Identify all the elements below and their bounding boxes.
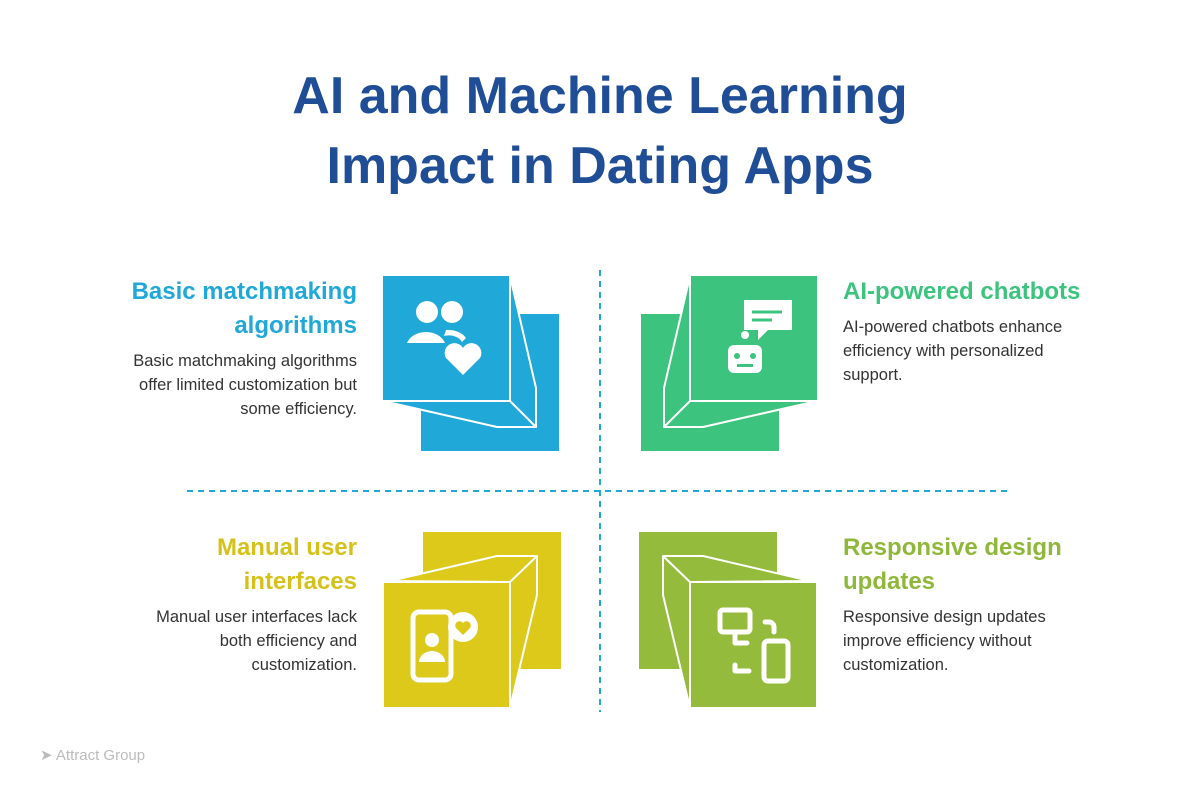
cube: yellow [383,531,562,708]
cube: blue [382,275,560,452]
logo: ➤ Attract Group [40,747,145,764]
title [292,67,908,195]
text: chatbots: AI-powered chatbots enhance efficiency with personalized support. [843,318,1062,384]
text: responsive: Responsive design updates [843,534,1062,595]
text: responsive: Responsive design updates improve efficiency without customization. [843,608,1046,674]
text: chatbots: AI-powered chatbots [843,278,1080,305]
icon: devices [720,610,788,681]
icon: phone heart [413,612,451,680]
text: basic matchmaking [132,278,357,418]
icon: robot chat [728,300,792,373]
text: manual UI [156,534,357,674]
icon: people heart [407,301,481,375]
text: basic matchmaking: Basic matchmaking algorithms [132,278,357,339]
text: basic matchmaking: Basic matchmaking algorithms offer limited customization but some efficiency. [133,352,357,418]
text: manual UI: Manual user interfaces lack both efficiency and customization. [156,608,357,674]
cube: green [640,275,818,452]
title: Impact in Dating Apps [326,137,874,195]
cube: lime [638,531,817,708]
text: chatbots [843,278,1080,384]
text: manual UI: Manual user interfaces [217,534,357,595]
text: responsive [843,534,1062,674]
title: AI and Machine Learning [292,67,908,125]
